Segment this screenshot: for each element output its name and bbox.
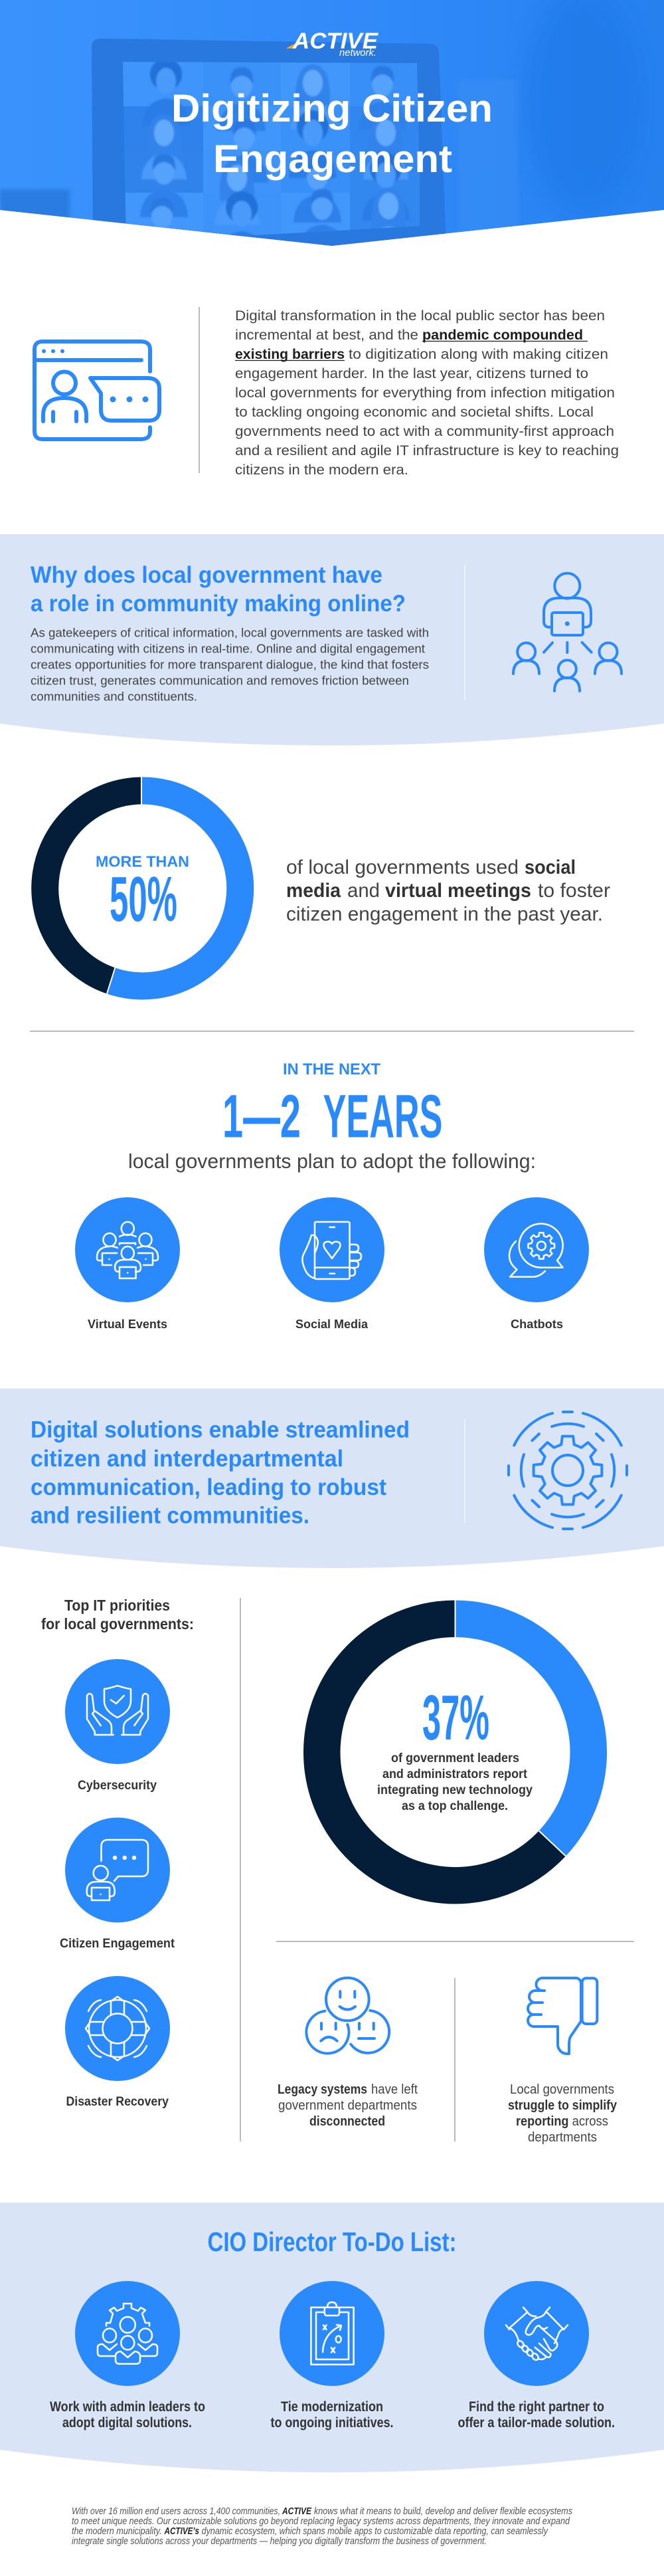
heading: a role in community making online?	[31, 591, 406, 617]
label: social media: Social Media	[295, 1318, 369, 1331]
label: chatbots: Chatbots	[511, 1318, 563, 1331]
footer text: the modern municipality.	[72, 2526, 162, 2537]
intro paragraph: citizens in the modern era.	[235, 462, 408, 478]
label: handshake: Find the right partner to	[469, 2399, 604, 2415]
heading: in the next 1-2 years	[128, 1060, 536, 1173]
intro paragraph: and a resilient and agile IT infrastructure is key to reaching	[235, 443, 619, 458]
label: disaster recovery: Disaster Recovery	[66, 2095, 169, 2109]
title: Digitizing Citizen	[171, 87, 493, 130]
heading: top IT priorities: for local governments:	[41, 1615, 194, 1633]
label: clipboard plan: to ongoing initiatives.	[271, 2415, 393, 2430]
footer text: With over 16 million end users across 1,400 communities,	[72, 2506, 280, 2517]
item: citizen engagement	[65, 1818, 170, 1923]
label: clipboard plan: Tie modernization	[281, 2399, 383, 2415]
body text	[31, 626, 429, 703]
heading: in the next 1-2 years: YEARS	[323, 1083, 442, 1151]
donut chart: more than 50%	[45, 776, 240, 995]
intro paragraph: pandemic compounded	[422, 328, 583, 343]
body text: communities and constituents.	[31, 690, 197, 703]
item: chatbots	[484, 1197, 589, 1302]
text: reporting: Local governments	[510, 2082, 614, 2097]
text: reporting: reporting	[516, 2114, 568, 2129]
stat description: as a top challenge.	[402, 1799, 508, 1813]
donut caption: to foster	[538, 880, 610, 902]
body text: communicating with citizens in real-time. Online and digital engagement	[31, 642, 425, 655]
heading: in the next 1-2 years: IN THE NEXT	[283, 1060, 380, 1078]
donut caption: of local governments used	[286, 856, 519, 878]
heading: in the next 1-2 years: local governments plan to adopt the following:	[128, 1149, 536, 1173]
body text: creates opportunities for more transparent dialogue, the kind that fosters	[31, 658, 429, 671]
stat description: and administrators report	[382, 1767, 528, 1781]
donut caption: and	[347, 880, 380, 902]
item: disaster recovery	[65, 1976, 170, 2081]
icon: browser window with person and chat bubble	[35, 342, 159, 439]
item: virtual events	[75, 1197, 180, 1302]
text: reporting: departments	[528, 2130, 597, 2145]
footer text	[72, 2506, 572, 2547]
intro paragraph: existing barriers	[235, 347, 345, 362]
label: handshake	[458, 2399, 615, 2430]
intro paragraph: to digitization along with making citizen	[349, 347, 608, 362]
label: admin leaders	[50, 2399, 205, 2430]
text: legacy systems: Legacy systems	[278, 2082, 367, 2097]
panel: why local government	[0, 534, 664, 745]
text: reporting: struggle to simplify	[508, 2098, 618, 2113]
icon: thumbs down	[528, 1978, 597, 2054]
panel: CIO to-do list	[0, 2203, 664, 2472]
heading: top IT priorities	[41, 1597, 194, 1633]
item: social media	[280, 1197, 384, 1302]
intro paragraph: engagement harder. In the last year, citizens turned to	[235, 366, 588, 381]
item: cybersecurity	[65, 1659, 170, 1764]
text: legacy systems: disconnected	[309, 2114, 385, 2129]
text: legacy systems: have left	[371, 2082, 418, 2097]
footer text: integrate single solutions across your departments — helping you digitally transform the business of government.	[72, 2536, 487, 2547]
heading	[31, 562, 406, 617]
body text: As gatekeepers of critical information, local governments are tasked with	[31, 626, 429, 639]
label: more than: MORE THAN	[96, 853, 189, 870]
icon: gear with concentric arcs	[509, 1412, 627, 1529]
logo: ACTIVE network: ACTIVE	[292, 29, 378, 54]
intro paragraph: incremental at best, and the	[235, 328, 418, 343]
label: cybersecurity: Cybersecurity	[78, 1779, 157, 1793]
heading: in the next 1-2 years: 1—2	[222, 1083, 301, 1151]
label: virtual events: Virtual Events	[88, 1318, 167, 1331]
heading: Why does local government have	[31, 562, 382, 588]
text: legacy systems	[278, 2082, 418, 2129]
footer text: ACTIVE’s	[164, 2526, 199, 2537]
text: legacy systems: government departments	[278, 2098, 417, 2113]
donut caption: media	[286, 880, 341, 902]
label: admin leaders: Work with admin leaders to	[50, 2399, 205, 2415]
heading: citizen and interdepartmental	[31, 1446, 343, 1472]
donut caption: virtual meetings	[385, 880, 531, 902]
panel: digital solutions	[0, 1389, 664, 1568]
laptop photo	[92, 39, 446, 261]
footer text: to meet unique needs. Our customizable solutions go beyond replacing legacy systems across departments, they innovate and expand	[72, 2516, 570, 2527]
icon: three faces	[306, 1978, 389, 2053]
intro paragraph: local governments for everything from infection mitigation	[235, 385, 615, 401]
intro paragraph: governments need to act with a community-first approach	[235, 424, 614, 439]
footer text: dynamic ecosystem, which spans mobile apps to customizable data reporting, can seamlessly	[202, 2526, 548, 2537]
footer text: knows what it means to build, develop and deliver flexible ecosystems	[314, 2506, 572, 2517]
intro paragraph: to tackling ongoing economic and societal shifts. Local	[235, 405, 594, 420]
header banner	[0, 0, 664, 261]
text: reporting: across	[572, 2114, 608, 2129]
donut chart: 37%	[322, 1599, 588, 1886]
heading: CIO Director To-Do List:	[207, 2227, 457, 2257]
intro paragraph	[235, 308, 619, 478]
body text: citizen trust, generates communication and removes friction between	[31, 674, 409, 687]
label: admin leaders: adopt digital solutions.	[62, 2415, 192, 2430]
logo: ACTIVE network: network.	[339, 47, 376, 58]
footer text: ACTIVE	[282, 2506, 312, 2517]
text: reporting	[508, 2082, 618, 2145]
heading: top IT priorities: Top IT priorities	[64, 1597, 170, 1614]
intro paragraph: Digital transformation in the local public sector has been	[235, 308, 605, 324]
heading	[31, 1417, 410, 1528]
heading: and resilient communities.	[31, 1503, 309, 1528]
stat: 50%: 50%	[110, 864, 177, 935]
donut caption	[286, 856, 610, 925]
item: clipboard plan	[280, 2281, 384, 2386]
stat description: integrating new technology	[377, 1783, 533, 1797]
heading: communication, leading to robust	[31, 1474, 386, 1500]
title: Engagement	[213, 138, 452, 181]
stat description: of government leaders	[391, 1751, 519, 1765]
title	[171, 87, 493, 181]
item: admin leaders	[75, 2281, 180, 2386]
label: handshake: offer a tailor-made solution.	[458, 2415, 615, 2430]
stat description	[377, 1751, 533, 1813]
icon: presenter with laptop and audience	[513, 573, 622, 691]
item: handshake	[484, 2281, 589, 2386]
donut caption: social	[525, 856, 576, 878]
label: citizen engagement: Citizen Engagement	[60, 1937, 175, 1951]
label: clipboard plan	[271, 2399, 393, 2430]
stat: 37%: 37%	[422, 1682, 489, 1753]
heading: Digital solutions enable streamlined	[31, 1417, 410, 1443]
donut caption: citizen engagement in the past year.	[286, 904, 603, 925]
